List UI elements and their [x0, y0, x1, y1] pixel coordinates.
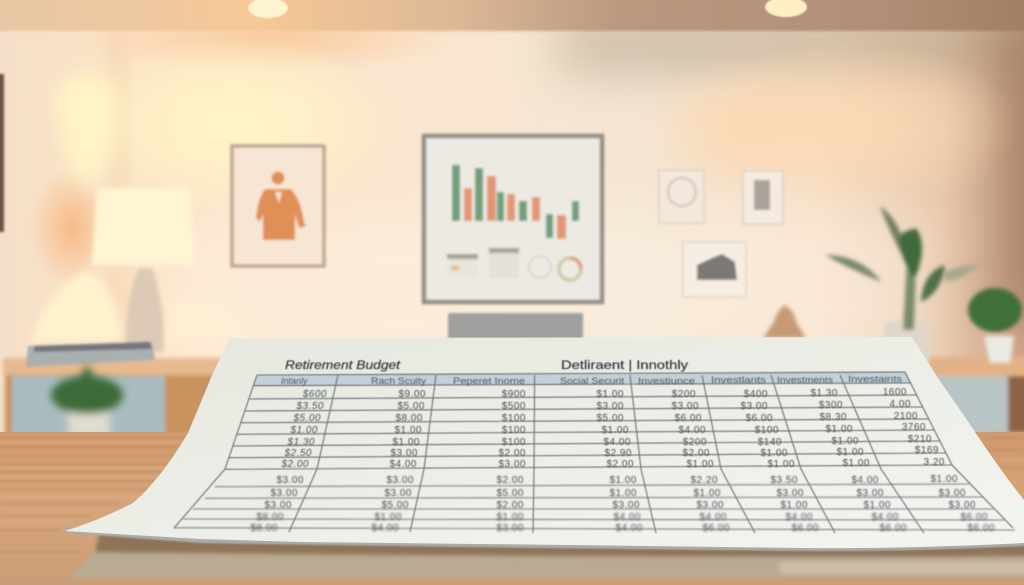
table rows 1-7: $1.30: [286, 437, 315, 448]
table rows 1-7: $2.00: [280, 459, 309, 470]
right console: [925, 357, 1024, 432]
ceiling light left: [248, 0, 288, 18]
table rows 1-7: $8.30: [819, 412, 847, 423]
table rows 8-10: $3.00: [938, 488, 966, 499]
table rows 11-12: $4.00: [871, 512, 899, 523]
table rows 11-12: $6.00: [791, 523, 819, 534]
table rows 1-7: $9.00: [398, 389, 426, 400]
table rows 1-7: $3.00: [740, 401, 768, 412]
table rows 8-10: $3.00: [948, 500, 976, 511]
small frame: clock: [659, 170, 704, 223]
table rows 11-12: [250, 512, 995, 534]
table rows 8-10: $3.00: [696, 500, 724, 511]
lamp shade: [92, 188, 195, 265]
table rows 1-7: $4.00: [389, 459, 417, 470]
table rows 8-10: $2.00: [496, 500, 524, 511]
table rows 8-10: $3.00: [264, 500, 292, 511]
table rows 8-10: $5.00: [381, 500, 409, 511]
table rows 8-10: $1.00: [693, 488, 721, 499]
wooden desk: [0, 432, 1024, 585]
sheet title right: Detliraent | Innothly: [561, 360, 688, 372]
table rows 11-12: $6.00: [879, 523, 907, 534]
table rows 1-7: $100: [502, 413, 526, 424]
wooden figurine: [763, 305, 806, 338]
table rows 1-7: $5.00: [292, 413, 321, 424]
pale band right: [780, 562, 1024, 574]
table rows 11-12: $4.00: [613, 512, 641, 523]
table rows 1-7: 3760: [902, 422, 926, 433]
table rows 1-7: $4.00: [678, 425, 706, 436]
table rows 1-7: $2.00: [498, 448, 526, 459]
table rows 11-12: $8.00: [250, 523, 278, 534]
table rows 1-7: $1.00: [601, 425, 629, 436]
table rows 1-7: $2.00: [682, 448, 710, 459]
budget sheet: [65, 337, 1024, 551]
table header labels: Peperet Inome: [453, 376, 525, 386]
table rows 1-7: $1.00: [836, 447, 864, 458]
table rows 1-7: $1.00: [767, 459, 795, 470]
table rows 11-12: $1.00: [496, 512, 524, 523]
table rows 8-10: $3.00: [776, 488, 804, 499]
table rows 1-7: $1.00: [686, 459, 714, 470]
table rows 1-7: $3.50: [295, 401, 324, 412]
table rows 8-10: $1.00: [609, 475, 637, 486]
table rows 1-7: $900: [502, 389, 526, 400]
table rows 1-7: 3.20: [924, 457, 945, 468]
table rows 1-7: $1.00: [394, 425, 422, 436]
table rows 1-7: $100: [502, 437, 526, 448]
far-left dark frame: [0, 74, 4, 232]
table rows 1-7: $300: [819, 400, 843, 411]
table header labels: [281, 374, 903, 386]
table rows 8-10: $1.00: [780, 500, 808, 511]
table rows 1-7: $8.00: [395, 413, 423, 424]
table rows 8-10: [264, 474, 976, 511]
table rows 1-7: $600: [302, 389, 327, 400]
framed person picture: [232, 146, 324, 266]
paper: [65, 337, 1024, 548]
framed bar chart: [424, 136, 602, 302]
sheet shadow on desk: [68, 534, 1024, 578]
table rows 1-7: $1.00: [825, 424, 853, 435]
table rows 1-7: 4.00: [890, 399, 911, 410]
table grid: [174, 372, 1013, 533]
table rows 1-7: $5.00: [596, 413, 624, 424]
table rows 1-7: $1.30: [810, 388, 838, 399]
small frame: landscape: [683, 242, 746, 297]
table header labels: Rach Scuity: [371, 376, 427, 386]
table rows 1-7: [280, 387, 945, 470]
table rows 1-7: $1.00: [392, 437, 420, 448]
sheet title left: Retirement Budget: [285, 360, 401, 372]
table rows 1-7: $200: [672, 389, 696, 400]
table rows 8-10: $3.00: [276, 475, 304, 486]
table rows 1-7: $2.50: [283, 448, 312, 459]
table rows 1-7: $140: [758, 437, 782, 448]
table rows 1-7: $1.00: [842, 458, 870, 469]
table rows 11-12: $8.00: [256, 512, 284, 523]
table rows 8-10: $4.00: [851, 475, 879, 486]
table rows 8-10: $3.00: [384, 488, 412, 499]
wall glows: [30, 2, 1020, 342]
paper edge shade: [65, 528, 1024, 551]
table header labels: Investiunce: [638, 376, 695, 386]
table rows 1-7: $6.00: [745, 413, 773, 424]
laptop behind sheet: [448, 313, 583, 343]
table rows 11-12: $6.00: [702, 523, 730, 534]
table rows 8-10: $1.00: [863, 500, 891, 511]
small potted plant right: [968, 288, 1022, 363]
table rows 8-10: $3.50: [770, 475, 798, 486]
table rows 1-7: $3.00: [671, 401, 699, 412]
table rows 1-7: $1.00: [831, 436, 859, 447]
icon: person: [256, 172, 306, 240]
table rows 1-7: $1.00: [760, 448, 788, 459]
table rows 1-7: $1.00: [596, 389, 624, 400]
table header labels: Investments: [777, 375, 834, 385]
dark contact shadow: [95, 530, 1024, 556]
table rows 11-12: $1.00: [374, 512, 402, 523]
table rows 11-12: $4.00: [699, 512, 727, 523]
lamp base: [126, 268, 164, 352]
small frame: portrait: [743, 171, 783, 224]
stacked books: [26, 342, 155, 367]
table rows 1-7: 1600: [883, 387, 907, 398]
table rows 8-10: $5.00: [496, 488, 524, 499]
table rows 1-7: $3.00: [596, 401, 624, 412]
table rows 8-10: $2.20: [690, 475, 718, 486]
table rows 1-7: $3.00: [390, 448, 418, 459]
left small plant: [51, 364, 123, 437]
table rows 1-7: $5.00: [397, 401, 425, 412]
table header fill: [253, 372, 911, 386]
right edge wall shading: [1000, 20, 1024, 320]
table rows 1-7: $2.90: [604, 448, 632, 459]
wood grain: [0, 438, 1024, 552]
left console: [3, 358, 228, 436]
table rows 8-10: $1.00: [609, 488, 637, 499]
table rows 1-7: $169: [915, 445, 939, 456]
table rows 11-12: $6.00: [967, 523, 995, 534]
table header labels: Investlants: [711, 375, 767, 385]
tall plant: [825, 206, 980, 362]
table header labels: Social Securit: [560, 376, 625, 386]
table rows 8-10: $1.00: [930, 474, 958, 485]
mini cards: [447, 248, 581, 280]
table rows 1-7: $3.00: [498, 459, 526, 470]
table rows 8-10: $3.00: [386, 475, 414, 486]
table rows 1-7: $2.00: [606, 459, 634, 470]
table header labels: Investaints: [848, 374, 903, 384]
table rows 1-7: $400: [744, 389, 768, 400]
table rows 8-10: $3.00: [856, 488, 884, 499]
table rows 1-7: $6.00: [674, 413, 702, 424]
upper wall shading on the right: [560, 20, 1024, 70]
table rows 1-7: $210: [908, 434, 932, 445]
table rows 1-7: $1.00: [289, 425, 318, 436]
table rows 1-7: $100: [502, 425, 526, 436]
lower wall pale wash: [170, 215, 930, 365]
table header labels: Intanly: [281, 376, 308, 386]
table rows 8-10: $3.00: [270, 488, 298, 499]
table rows 11-12: $4.00: [371, 523, 399, 534]
ceiling light right: [765, 0, 807, 17]
table rows 1-7: $500: [502, 401, 526, 412]
table rows 1-7: $100: [755, 425, 779, 436]
wall background: [0, 0, 1024, 440]
table lamp: [92, 188, 195, 352]
table rows 11-12: $4.00: [785, 512, 813, 523]
table rows 8-10: $2.00: [496, 475, 524, 486]
table rows 11-12: $3.00: [496, 523, 524, 534]
ceiling band: [0, 0, 1024, 31]
table rows 1-7: $4.00: [603, 437, 631, 448]
table rows 8-10: $3.00: [612, 500, 640, 511]
table rows 11-12: $6.00: [960, 512, 988, 523]
table rows 1-7: $200: [683, 437, 707, 448]
chart bars: [452, 165, 579, 239]
table rows 1-7: 2100: [894, 411, 918, 422]
table rows 11-12: $4.00: [615, 523, 643, 534]
